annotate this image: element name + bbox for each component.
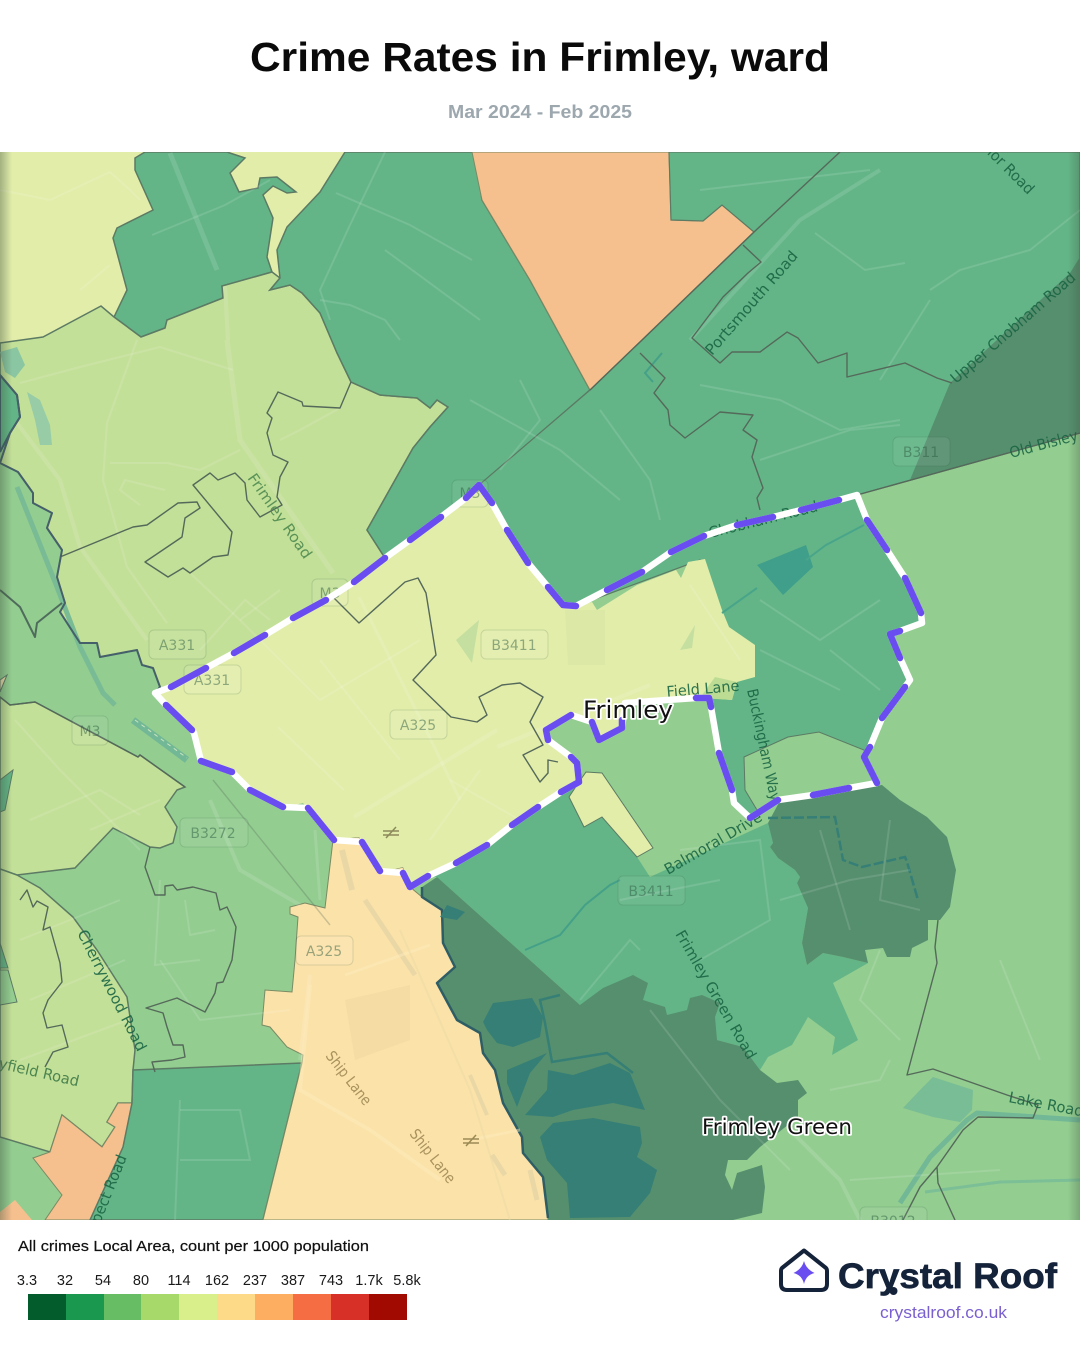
area: orange south-west (33, 1103, 132, 1220)
legend values: 743 (319, 1273, 343, 1289)
badge: A325 ward: A325 (400, 718, 436, 734)
area: light green patch inside ward east (744, 732, 878, 810)
road name labels: Manor Road (965, 125, 1038, 198)
badge: B3272: B3272 (190, 826, 236, 842)
area: light green Cherrywood Road (0, 869, 135, 1152)
place label: Frimley Green: Frimley Green (702, 1115, 852, 1139)
legend values: 237 (243, 1273, 267, 1289)
badge: B3411 south: B3411 (628, 884, 674, 900)
area: light green south-west (0, 697, 185, 875)
road name labels: Balmoral Drive (661, 808, 765, 878)
place label: Frimley: Frimley (583, 696, 673, 724)
icon: key dot on y (890, 1287, 898, 1295)
road name labels: Upper Chobham Road (947, 268, 1079, 387)
road name labels: pect Road (87, 1152, 131, 1225)
road name labels: Buckingham Way (743, 687, 784, 802)
website: crystalroof.co.uk (880, 1304, 1008, 1322)
map edge fade (0, 152, 1080, 1220)
legend values (17, 1273, 421, 1289)
badge: A331 south: A331 (194, 673, 230, 689)
badge: A331 south (184, 665, 241, 694)
legend values: 1.7k (355, 1273, 383, 1289)
area: orange corner (0, 1200, 32, 1220)
badge: M3 west (72, 716, 108, 745)
badge: M3 west: M3 (80, 724, 100, 740)
area: dark green blob east (768, 785, 956, 965)
badge: B3411 ward: B3411 (491, 638, 537, 654)
road network (0, 152, 1080, 1220)
road name labels: Ship Lane (406, 1125, 459, 1187)
wordmark: Crystal Roof (838, 1257, 1057, 1296)
area: green north-east block (479, 152, 1080, 818)
legend values: 32 (57, 1273, 73, 1289)
badge: B3272 (180, 818, 248, 847)
area: Frimley ward pale zone (155, 485, 755, 887)
legend values: 3.3 (17, 1273, 37, 1289)
badge: A331 north (149, 630, 206, 659)
legend values: 162 (205, 1273, 229, 1289)
title: Crime Rates in Frimley, ward (250, 34, 830, 80)
badge: A325 south: A325 (306, 944, 342, 960)
badge: B311 (893, 437, 950, 466)
area: green south-west block (90, 1063, 302, 1220)
area: dark green lakes district (422, 877, 807, 1220)
badge: M3 north: M3 (460, 486, 480, 502)
area: dark green north-east corner (910, 257, 1080, 480)
area: pale tail south of ward (569, 772, 653, 857)
legend values: 5.8k (393, 1273, 421, 1289)
area: yellow A325 corridor (262, 837, 548, 1220)
sand shading along railway (300, 850, 537, 1220)
ward boundary dashed outline (155, 485, 922, 887)
road name labels: Field Lane (666, 677, 740, 701)
badge: A331 north: A331 (159, 638, 195, 654)
road name labels: Portsmouth Road (701, 247, 802, 359)
icon: train station south (463, 1135, 479, 1146)
road name labels: Chobham Road (707, 497, 820, 542)
badge: M3 centre (312, 579, 348, 606)
legend title: All crimes Local Area, count per 1000 population (18, 1239, 369, 1255)
area: forest ponds inside ward (456, 525, 864, 665)
area: green river pocket (0, 375, 20, 452)
road name labels: Cherrywood Road (73, 927, 150, 1054)
badge: M3 centre: M3 (320, 586, 340, 602)
road name labels: Frimley Road (244, 470, 316, 562)
legend colour scale (28, 1294, 407, 1320)
area: light green Frimley Road district (0, 272, 448, 693)
area: pale north-west (0, 152, 345, 343)
legend (17, 1239, 421, 1320)
badge: A325 ward (390, 710, 447, 739)
badge: B3411 ward (481, 630, 548, 659)
logo (781, 1250, 1057, 1322)
road name labels: Ship Lane (322, 1047, 375, 1109)
badge: B311: B311 (903, 445, 939, 461)
area: small western patches (0, 675, 17, 1005)
icon: house with star (781, 1250, 827, 1290)
area: yellow-green Field Lane patch (700, 677, 737, 700)
legend values: 114 (167, 1273, 191, 1289)
icon: train station north (383, 827, 399, 838)
badge: B3012 (860, 1207, 927, 1236)
area: green Frimley Green Road (426, 782, 868, 1070)
water edge along lakes district (422, 887, 548, 1218)
badge: A325 south (296, 936, 353, 965)
legend values: 54 (95, 1273, 111, 1289)
water: lakes (440, 905, 657, 1218)
date range subtitle: Mar 2024 - Feb 2025 (448, 102, 632, 122)
legend values: 387 (281, 1273, 305, 1289)
boundary lines (0, 152, 1080, 1220)
area: green north-west block (113, 152, 296, 337)
area: orange north (472, 152, 754, 390)
area: green north block (270, 152, 590, 558)
water: streams and ponds (0, 347, 1080, 1203)
road name labels: Frimley Green Road (672, 927, 760, 1062)
badge: B3411 south (618, 876, 685, 905)
road badges (72, 437, 950, 1236)
legend values: 80 (133, 1273, 149, 1289)
badge: B3012: B3012 (870, 1214, 916, 1230)
badge: M3 north (452, 480, 488, 507)
